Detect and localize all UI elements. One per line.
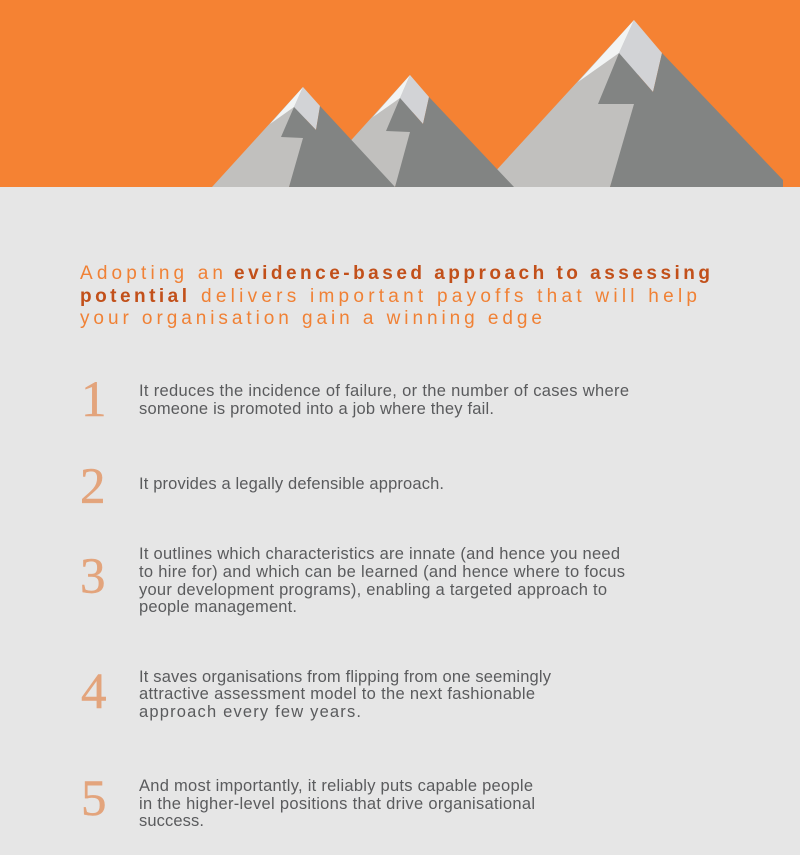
heading: delivers important payoffs that will help (201, 286, 697, 307)
item 3 text: your development programs), enabling a targeted approach to (139, 581, 607, 599)
item 3 text (139, 545, 625, 616)
heading: potential (80, 286, 187, 307)
item 1 (81, 372, 629, 428)
number 3: 3 (80, 549, 106, 605)
item 3 text: It outlines which characteristics are innate (and hence you need (139, 545, 620, 563)
orange header band (0, 0, 800, 187)
item 3 (80, 545, 625, 616)
item 4 text (139, 668, 552, 721)
item 4 text: It saves organisations from flipping from one seemingly (139, 668, 552, 686)
item 1 text: someone is promoted into a job where they fail. (139, 400, 494, 418)
number 2: 2 (80, 459, 106, 515)
item 1 text (139, 382, 629, 418)
mountain: right (481, 20, 783, 187)
item 5 text (139, 777, 535, 830)
illustration: three mountains (212, 20, 783, 187)
number 5: 5 (81, 771, 106, 827)
item 5 text: And most importantly, it reliably puts capable people (139, 777, 533, 795)
item 4 text: approach every few years. (139, 703, 361, 721)
number 1: 1 (81, 372, 106, 428)
item 4 (81, 664, 552, 721)
mountain: middle (345, 75, 514, 187)
item 5 (81, 771, 535, 830)
heading: evidence-based approach to assessing (234, 263, 710, 284)
item 4 text: attractive assessment model to the next fashionable (139, 685, 535, 703)
heading: Adopting an (80, 263, 223, 284)
heading (80, 263, 710, 329)
item 3 text: to hire for) and which can be learned (and hence where to focus (139, 563, 625, 581)
item 5 text: success. (139, 812, 204, 830)
mountain: left (212, 87, 395, 187)
heading: your organisation gain a winning edge (80, 308, 542, 329)
item 1 text: It reduces the incidence of failure, or the number of cases where (139, 382, 629, 400)
item 3 text: people management. (139, 598, 297, 616)
number 4: 4 (81, 664, 106, 720)
item 2 text: It provides a legally defensible approach. (139, 475, 444, 493)
item 5 text: in the higher-level positions that drive organisational (139, 795, 535, 813)
item 2 (80, 459, 444, 515)
